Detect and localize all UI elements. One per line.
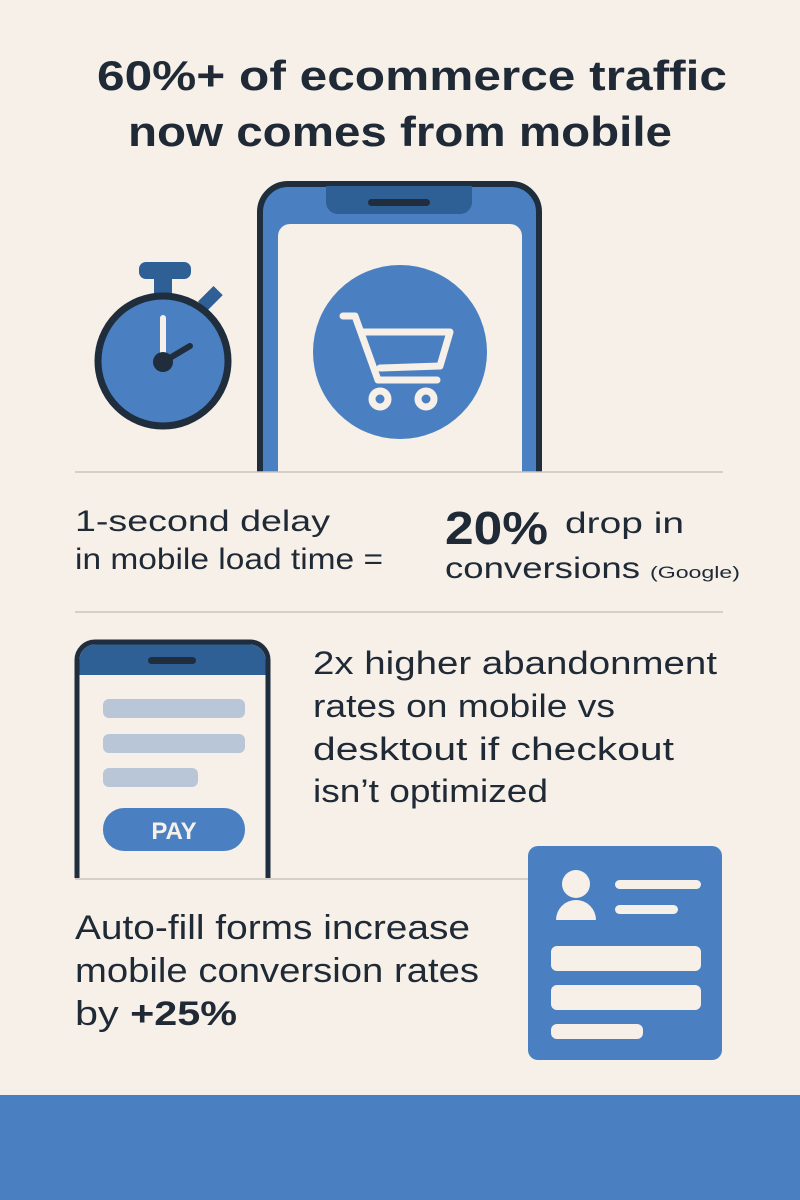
stat: auto-fill: Auto-fill forms increase	[75, 909, 470, 947]
footer bar	[0, 1095, 800, 1200]
stat: load time delay	[75, 502, 740, 585]
stat: auto-fill: mobile conversion rates	[75, 952, 479, 990]
stat: auto-fill	[75, 909, 479, 1033]
title: 60%+ of ecommerce traffic	[97, 52, 727, 99]
icon: stopwatch	[98, 262, 228, 426]
stat: auto-fill: by +25%	[75, 995, 237, 1033]
stat: abandonment	[313, 645, 717, 809]
icon: autofill form card	[528, 846, 722, 1060]
stat: load time delay: 1-second delay	[75, 505, 330, 538]
stat: load time delay: drop in	[565, 507, 684, 540]
stat: load time delay: conversions	[445, 552, 640, 585]
stat: abandonment: 2x higher abandonment	[313, 645, 717, 681]
icon: checkout phone: PAY	[151, 818, 197, 845]
icon: phone with cart	[260, 184, 539, 472]
title	[97, 52, 727, 155]
stat: abandonment: desktout if checkout	[313, 731, 674, 767]
stat: load time delay: 20%	[445, 502, 548, 554]
stat: abandonment: rates on mobile vs	[313, 688, 615, 724]
title: now comes from mobile	[128, 108, 672, 155]
stat: abandonment: isn’t optimized	[313, 773, 548, 809]
stat: load time delay: (Google)	[650, 563, 740, 582]
stat: load time delay: in mobile load time =	[75, 543, 383, 576]
icon: checkout phone	[77, 642, 268, 878]
